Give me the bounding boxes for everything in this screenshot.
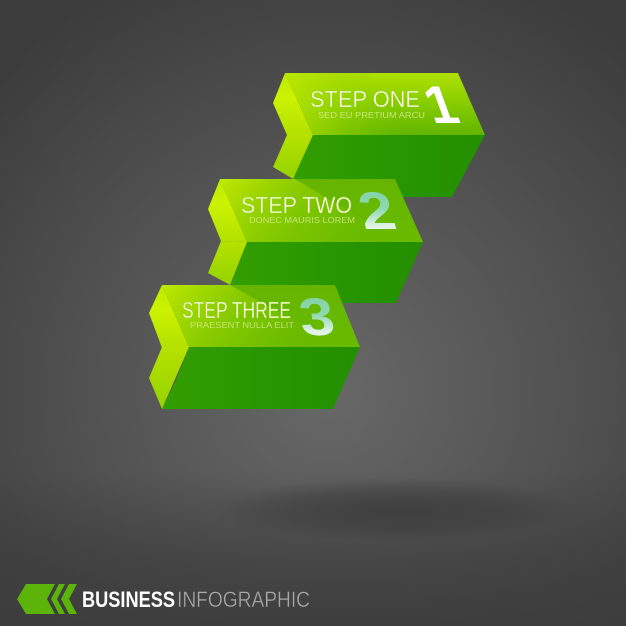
left side faces: [273, 73, 313, 135]
front face: [162, 347, 360, 409]
subtitle: DONEC MAURIS LOREM: [249, 215, 355, 225]
title: STEP TWO: [241, 192, 352, 218]
block: step three: [149, 285, 360, 409]
logo: chevron icon: [17, 584, 77, 614]
top face: [162, 285, 360, 347]
logo: wordmark: INFOGRAPHIC: [177, 587, 310, 612]
top face: [285, 73, 485, 135]
number 3: 3: [295, 288, 338, 347]
title: STEP ONE: [310, 86, 420, 112]
top face: [220, 179, 423, 242]
left side faces: [208, 179, 247, 242]
logo: wordmark: BUSINESS: [82, 587, 175, 612]
front face: [230, 242, 423, 303]
subtitle: SED EU PRETIUM ARCU: [318, 110, 425, 120]
number 1: 1: [416, 76, 466, 135]
subtitle: PRAESENT NULLA ELIT: [190, 320, 294, 330]
number 2: 2: [352, 182, 402, 241]
ground shadow: [210, 478, 580, 542]
logo: wordmark: [82, 587, 310, 612]
front face: [287, 135, 485, 197]
title: STEP THREE: [182, 297, 291, 323]
left side faces: [149, 285, 189, 348]
block: step two: [208, 179, 423, 303]
block: step one: [273, 73, 485, 197]
